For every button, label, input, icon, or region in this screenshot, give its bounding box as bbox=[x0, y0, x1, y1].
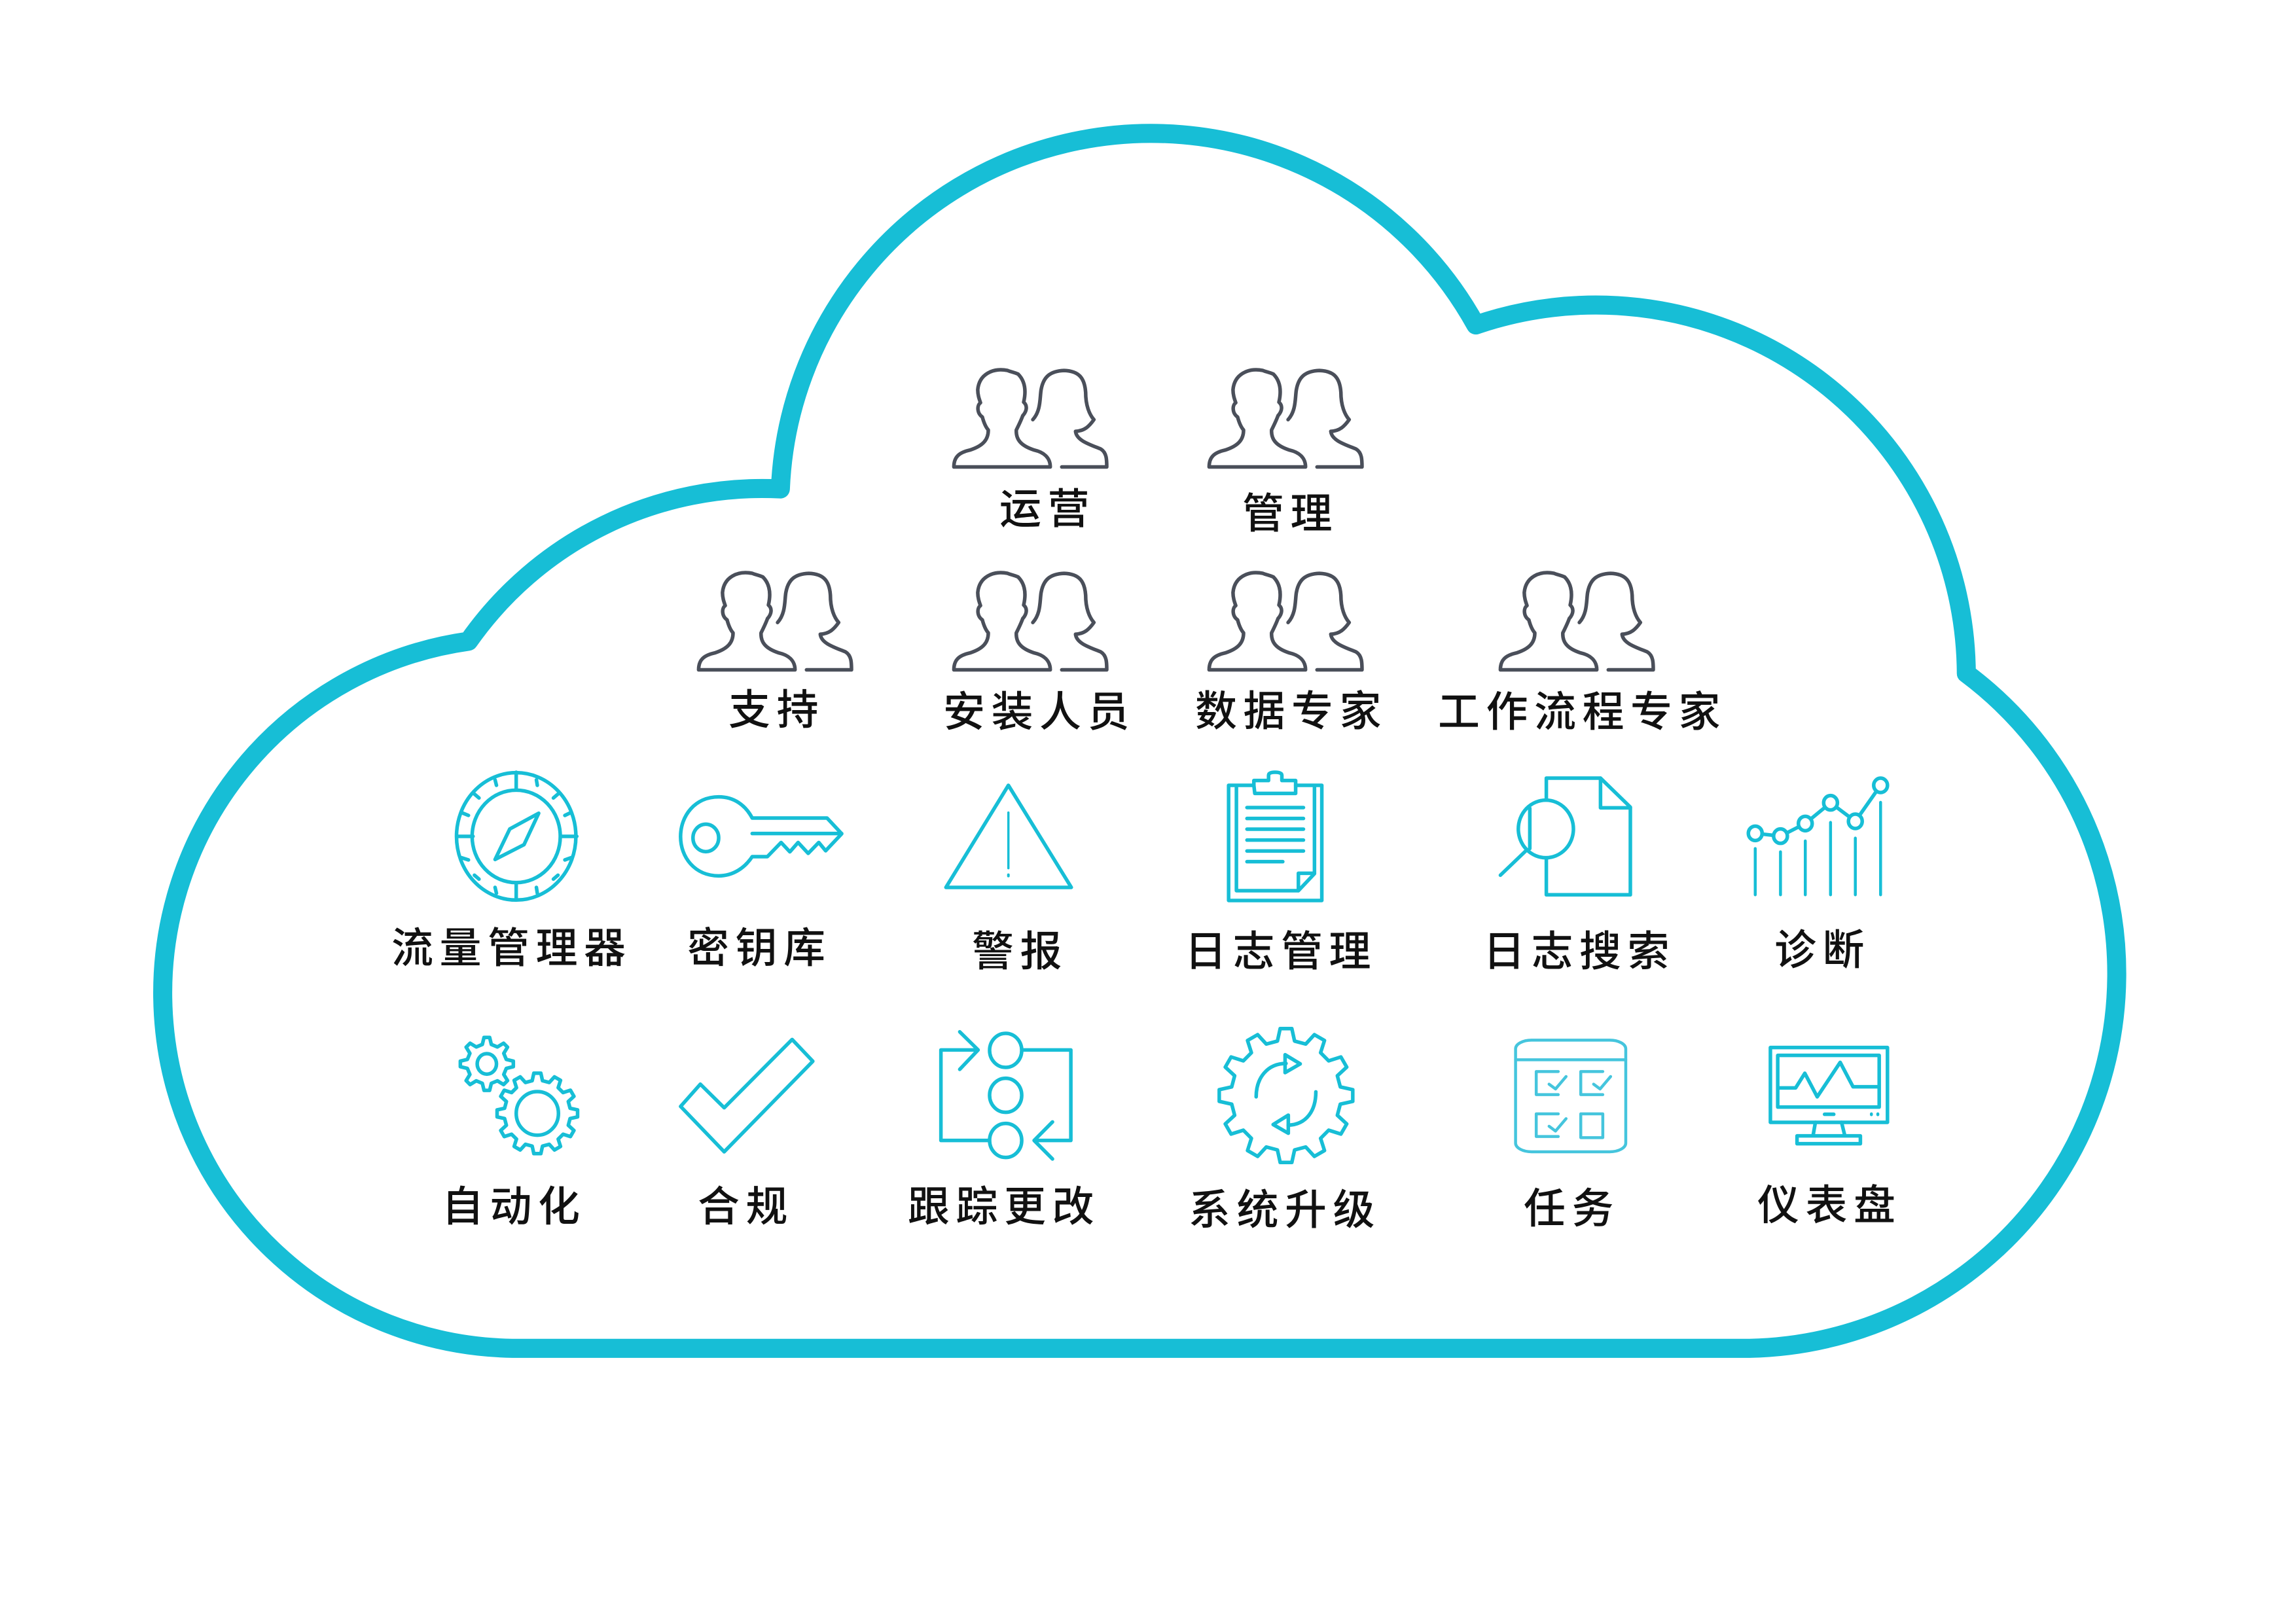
icon: people 数据专家 bbox=[1209, 573, 1362, 670]
icon: gears bbox=[460, 1037, 577, 1154]
label: 自动化: 自动化 bbox=[442, 1183, 586, 1230]
label: 工作流程专家: 工作流程专家 bbox=[1438, 688, 1727, 736]
label: 警报: 警报 bbox=[972, 928, 1068, 975]
label: 管理: 管理 bbox=[1242, 490, 1338, 537]
icon: compass bbox=[456, 772, 577, 900]
cloud outline bbox=[163, 134, 2117, 1348]
label: 合规: 合规 bbox=[698, 1183, 794, 1230]
icon: system upgrade gear bbox=[1219, 1029, 1353, 1162]
icon: line chart bbox=[1748, 778, 1888, 895]
icon: people 运营 bbox=[954, 370, 1107, 467]
icon: people 安装人员 bbox=[954, 573, 1107, 670]
label: 安装人员: 安装人员 bbox=[943, 688, 1136, 736]
icon: alert triangle bbox=[946, 785, 1071, 887]
label: 密钥库: 密钥库 bbox=[687, 925, 831, 972]
label: 日志管理: 日志管理 bbox=[1185, 928, 1377, 975]
label: 运营: 运营 bbox=[999, 486, 1096, 533]
icon: document search bbox=[1500, 778, 1630, 895]
icon: key bbox=[681, 797, 842, 876]
label: 支持: 支持 bbox=[728, 687, 825, 734]
icon: people 工作流程专家 bbox=[1500, 573, 1653, 670]
icon: dashboard monitor bbox=[1770, 1048, 1888, 1144]
icon: check mark bbox=[681, 1039, 813, 1152]
label: 跟踪更改: 跟踪更改 bbox=[908, 1183, 1100, 1230]
icon: track changes bbox=[941, 1032, 1071, 1159]
icon: people 管理 bbox=[1209, 370, 1362, 467]
label: 数据专家: 数据专家 bbox=[1195, 688, 1388, 735]
icon: people 支持 bbox=[698, 573, 852, 670]
label: 系统升级: 系统升级 bbox=[1189, 1186, 1381, 1234]
icon: clipboard bbox=[1229, 772, 1322, 901]
label: 日志搜索: 日志搜索 bbox=[1483, 928, 1676, 975]
label: 仪表盘: 仪表盘 bbox=[1757, 1182, 1902, 1229]
label: 诊断: 诊断 bbox=[1774, 927, 1871, 974]
label: 流量管理器: 流量管理器 bbox=[391, 925, 632, 972]
icon: task list bbox=[1516, 1040, 1626, 1152]
label: 任务: 任务 bbox=[1524, 1185, 1620, 1232]
